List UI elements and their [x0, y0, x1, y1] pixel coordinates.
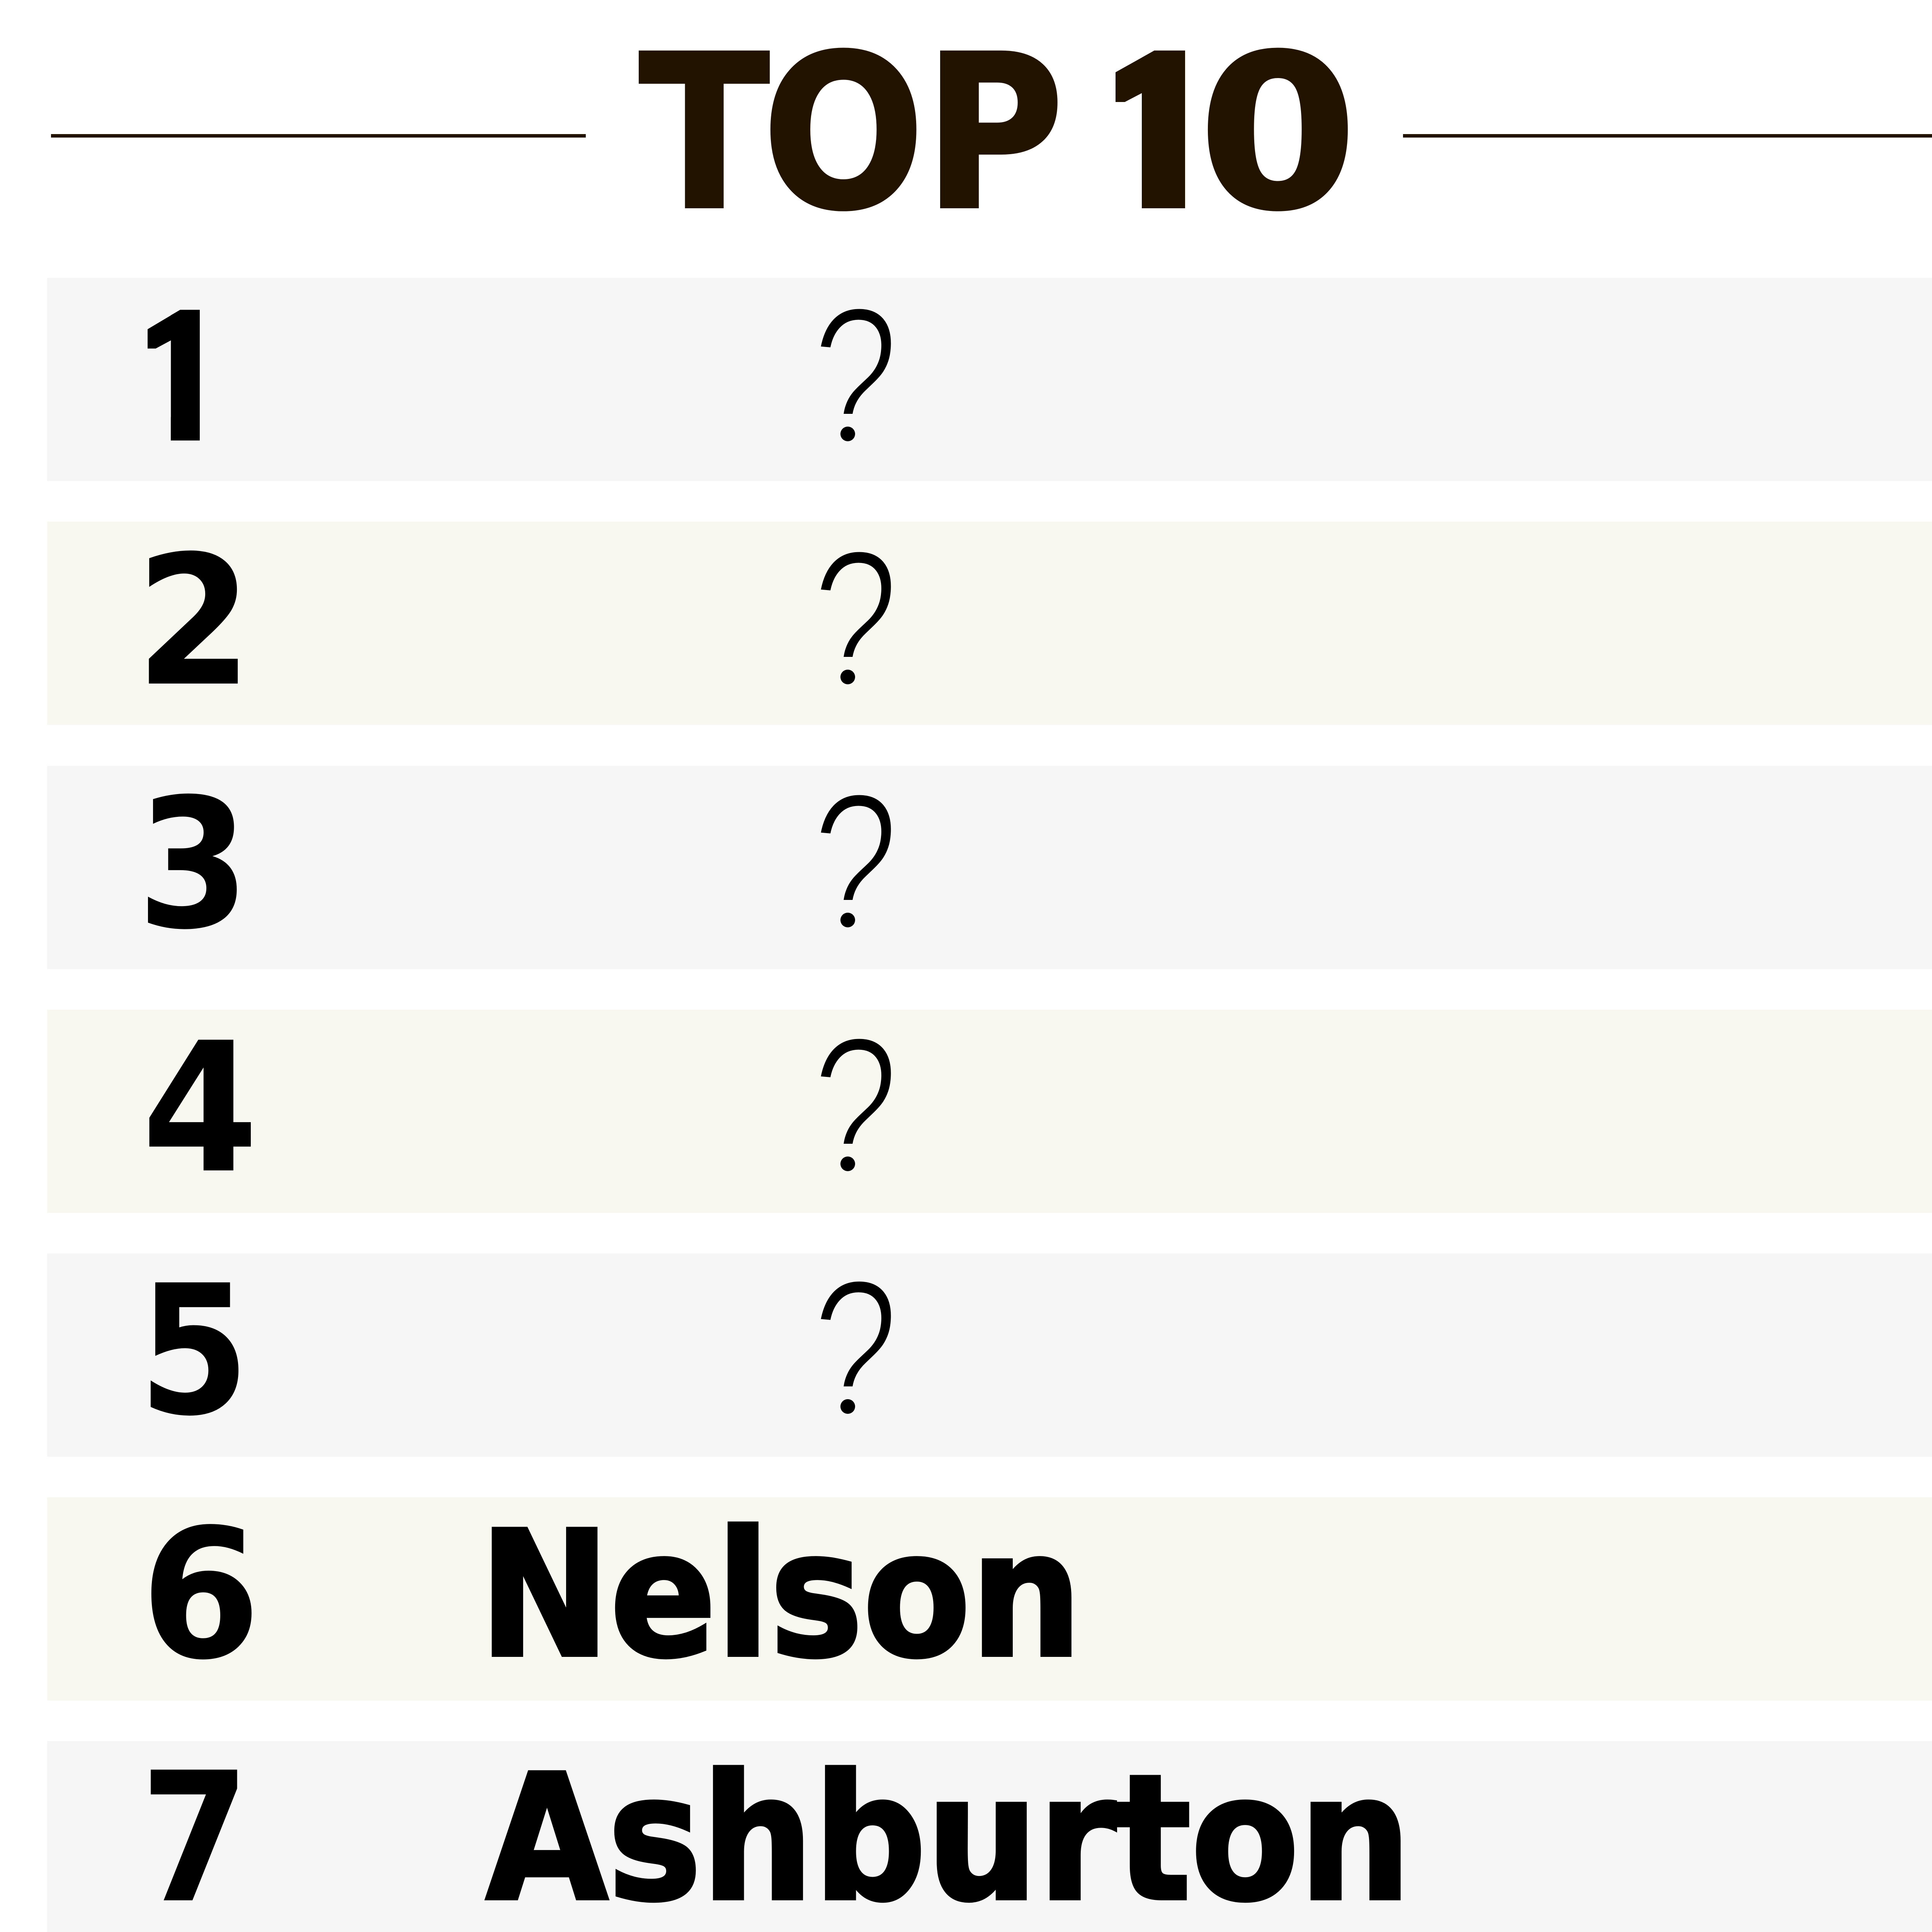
row 1: [47, 262, 1932, 504]
title: TOP: [639, 10, 1064, 257]
row 5: ?: [801, 1234, 905, 1476]
row 5: 5: [138, 1247, 250, 1456]
row 6: Nelson: [479, 1494, 1082, 1696]
row 7: [47, 1734, 1932, 1932]
row 3: [47, 748, 1932, 990]
title: 1: [1071, 10, 1242, 257]
row 6: 6: [141, 1491, 261, 1699]
row 5: [47, 1253, 1932, 1457]
row 4: [47, 992, 1932, 1234]
title: 0: [1199, 10, 1357, 257]
row 2: 2: [136, 517, 252, 726]
row 2: ?: [801, 505, 905, 747]
row 3: 3: [137, 760, 250, 969]
title: [51, 10, 1932, 257]
row 1: 1: [125, 274, 238, 483]
row 4: ?: [801, 992, 905, 1234]
row 1: ?: [801, 262, 905, 504]
row 3: ?: [801, 748, 905, 990]
row 6: [47, 1491, 1932, 1701]
row 2: [47, 505, 1932, 747]
row 4: 4: [142, 1004, 259, 1213]
